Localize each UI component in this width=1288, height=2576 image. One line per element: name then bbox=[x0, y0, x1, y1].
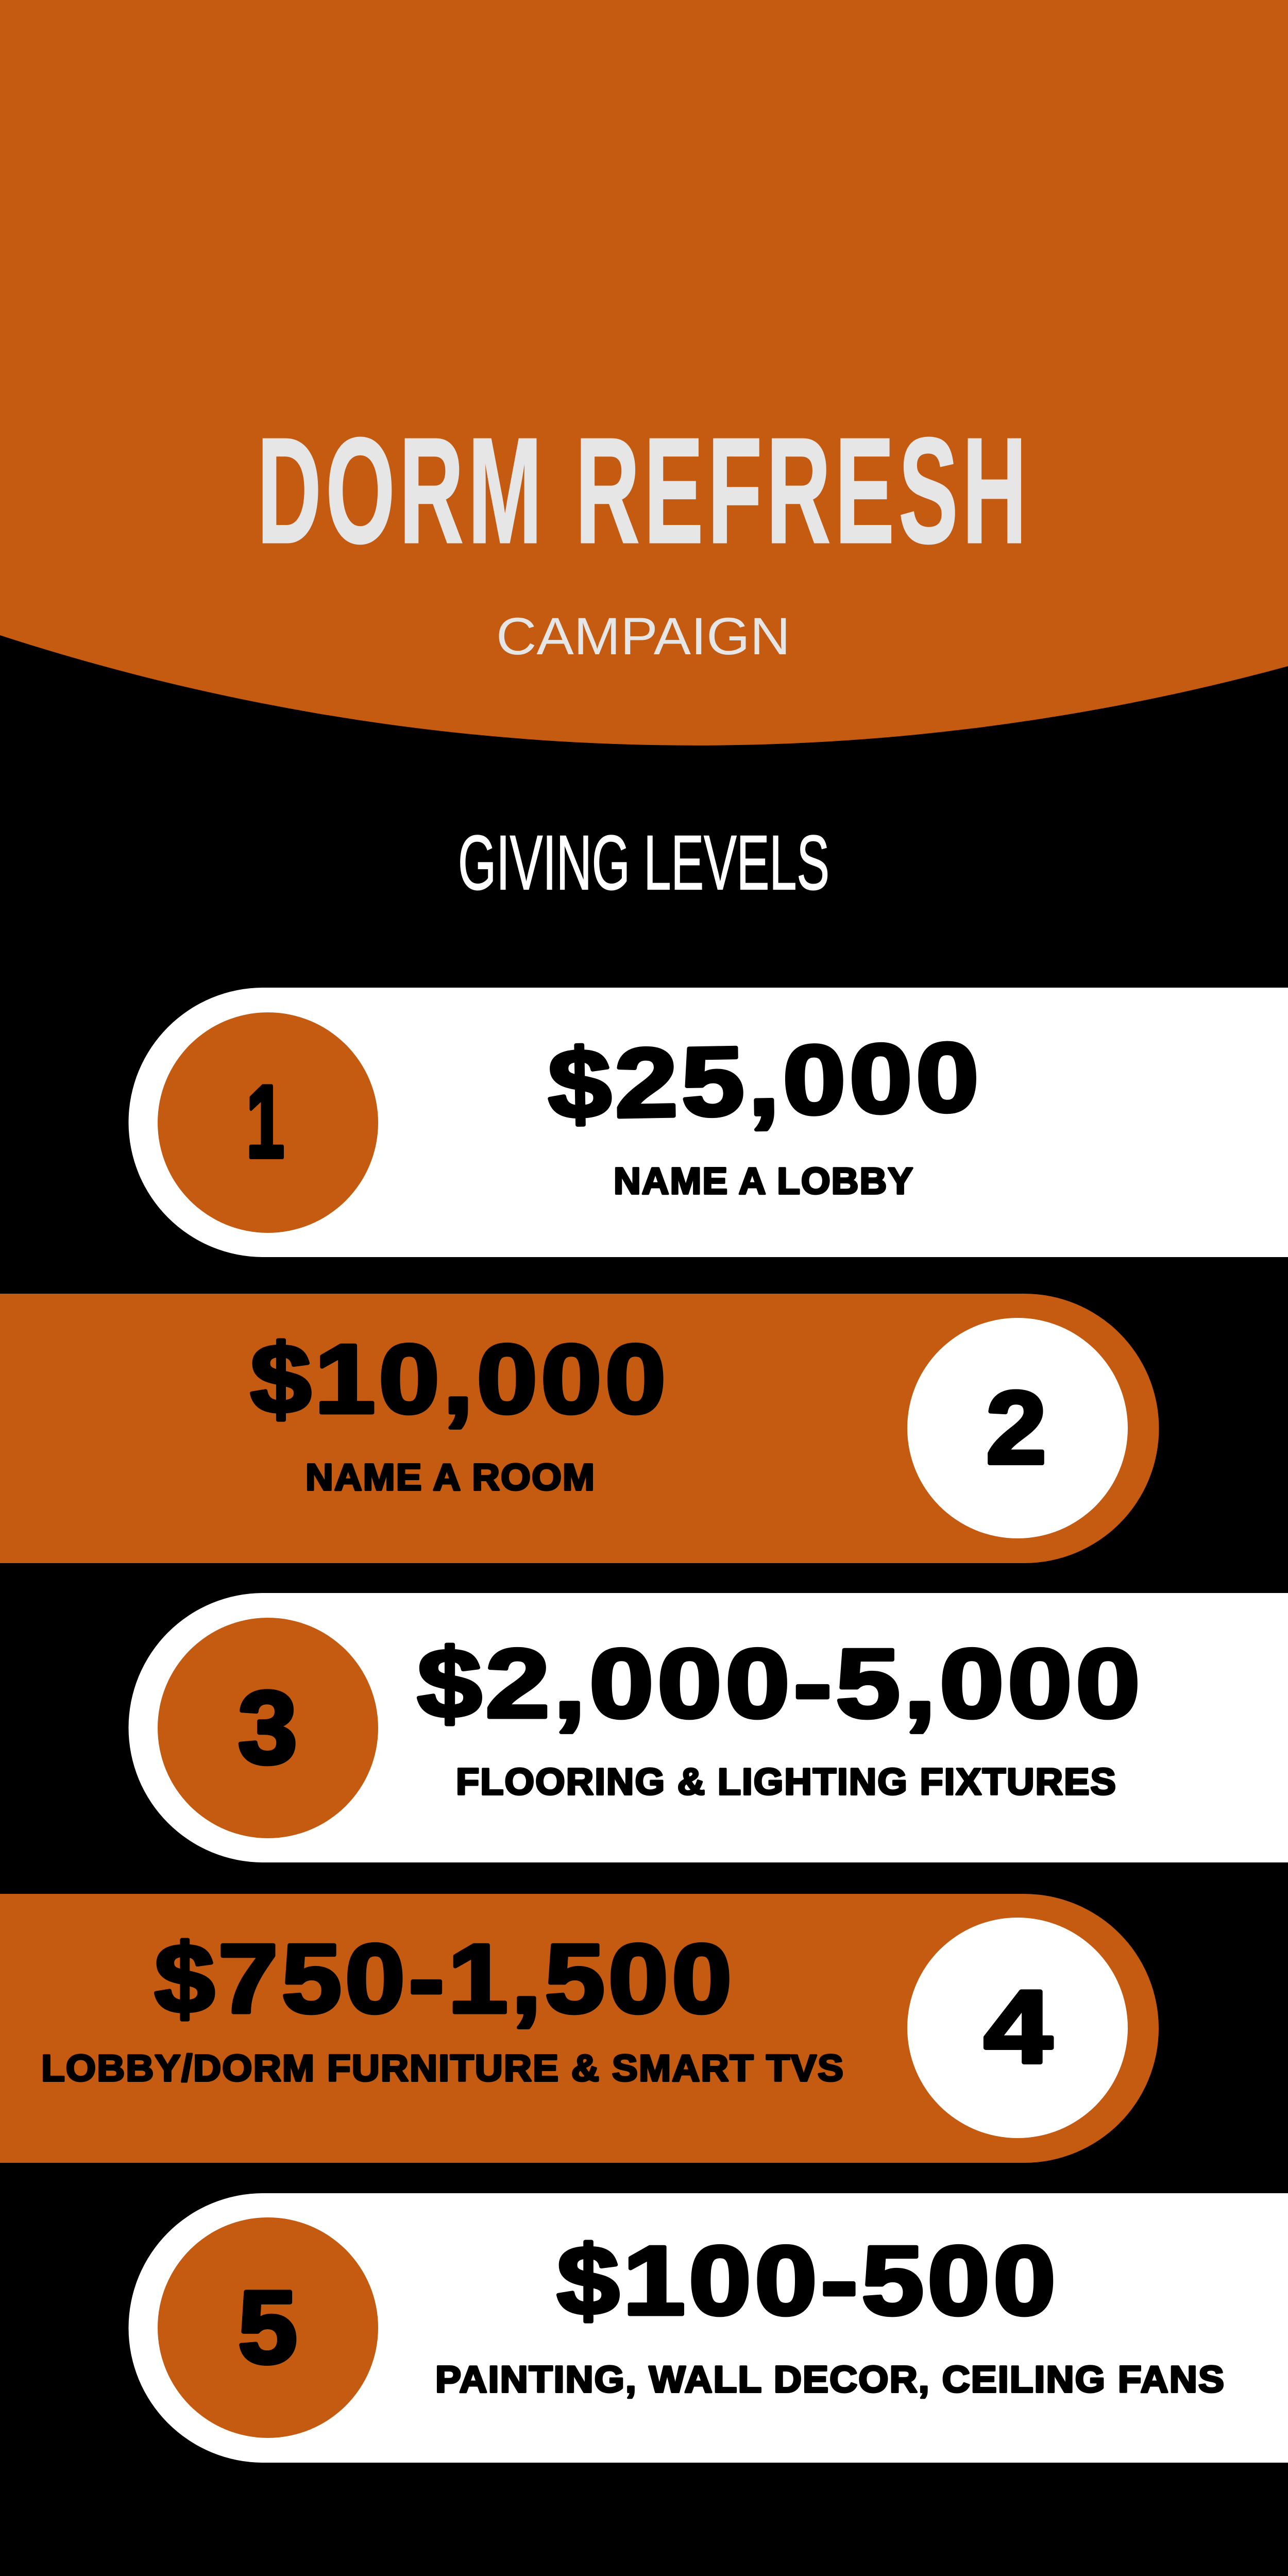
panel: level 4 bbox=[0, 1894, 1159, 2163]
level 5 badge bbox=[158, 2217, 378, 2438]
level 2 description: NAME A ROOM bbox=[306, 1457, 596, 1498]
level 5 description: PAINTING, WALL DECOR, CEILING FANS bbox=[435, 2359, 1225, 2400]
level 4 pill bbox=[0, 1894, 1159, 2163]
level 2 number: 2 bbox=[986, 1370, 1046, 1485]
level 4 amount: $750-1,500 bbox=[155, 1924, 735, 2033]
level 3 number: 3 bbox=[238, 1670, 297, 1785]
level 5 number: 5 bbox=[238, 2270, 297, 2385]
level 3 amount: $2,000-5,000 bbox=[417, 1629, 1144, 1738]
panel: level 3 bbox=[128, 1593, 1288, 1862]
level 1 amount: $25,000 bbox=[547, 1023, 984, 1139]
level 1 description: NAME A LOBBY bbox=[614, 1161, 914, 1202]
level 2 amount: $10,000 bbox=[250, 1325, 669, 1434]
level 2 pill bbox=[0, 1294, 1159, 1563]
subtitle: CAMPAIGN bbox=[496, 607, 790, 666]
level 5 pill bbox=[128, 2193, 1288, 2463]
level 3 badge bbox=[158, 1618, 378, 1838]
heading: giving levels: GIVING LEVELS bbox=[458, 819, 829, 906]
header panel: orange curved banner bbox=[0, 0, 1288, 745]
level 1 pill bbox=[128, 988, 1288, 1257]
level 5 amount: $100-500 bbox=[557, 2226, 1059, 2335]
level 4 description: LOBBY/DORM FURNITURE & SMART TVS bbox=[41, 2048, 844, 2089]
level 1 badge bbox=[158, 1012, 378, 1233]
level 4 number: 4 bbox=[984, 1970, 1052, 2084]
level 4 badge bbox=[907, 1918, 1128, 2138]
level 1 number: 1 bbox=[246, 1064, 284, 1179]
panel: level 1 bbox=[128, 988, 1288, 1257]
panel: level 5 bbox=[128, 2193, 1288, 2463]
level 2 badge bbox=[907, 1318, 1128, 1538]
panel: level 2 bbox=[0, 1294, 1159, 1563]
level 3 pill bbox=[128, 1593, 1288, 1862]
level 3 description: FLOORING & LIGHTING FIXTURES bbox=[456, 1761, 1117, 1803]
